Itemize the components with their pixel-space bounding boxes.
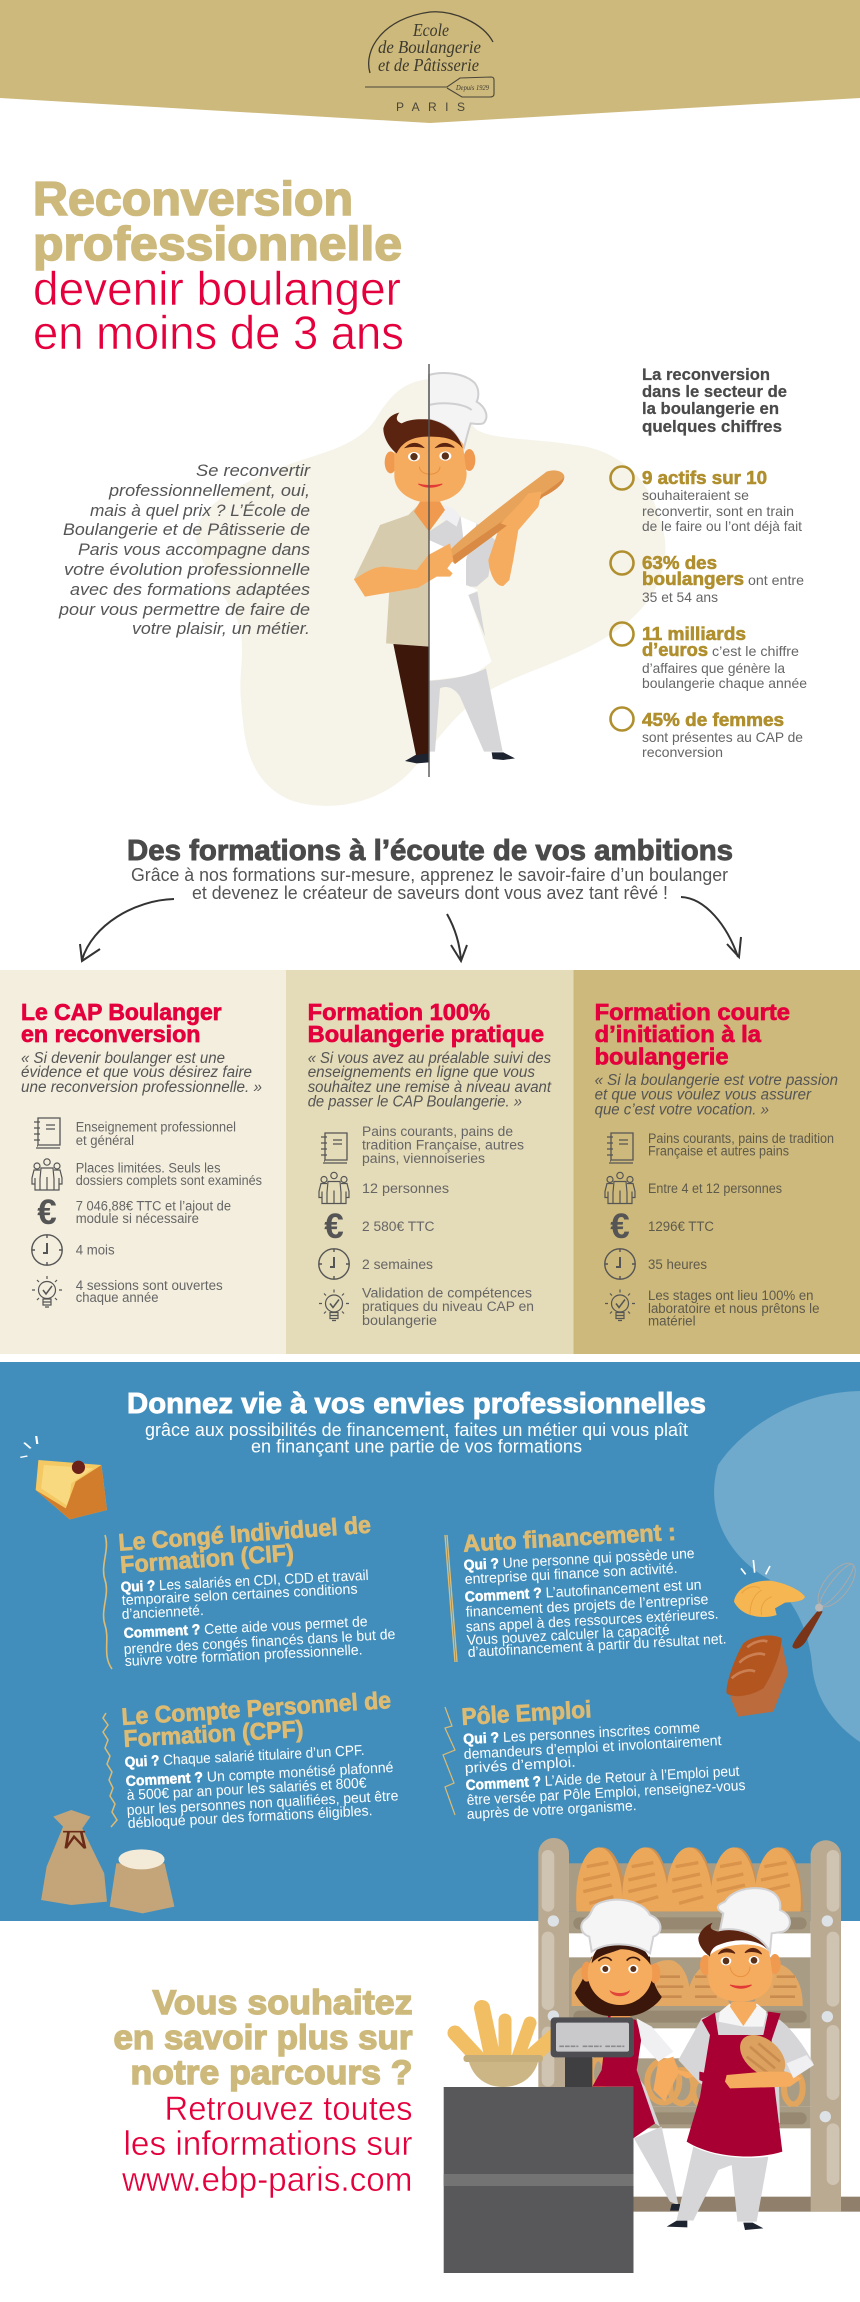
panel: Formation courte: Formation courte [595,999,790,1025]
panel: Formation courte: Entre 4 et 12 personnes [648,1181,782,1196]
block: Auto financement: financement des projets de l’entreprise [465,1592,709,1621]
intro paragraph: votre évolution professionnelle [64,561,310,579]
block: CIF [104,1512,396,1670]
stat: 45% de femmes [610,708,803,760]
panel: Formation 100%: boulangerie [362,1313,437,1328]
counter [444,2087,634,2273]
title: en moins de 3 ans [33,306,404,359]
section heading: formations: et devenez le créateur de saveurs dont vous avez tant rêvé ! [192,883,668,903]
panel: CAP Boulanger: évidence et que vous désirez faire [21,1064,252,1081]
logo: École de Boulangerie et de Pâtisserie: de Boulangerie [378,37,481,57]
block: Auto financement [445,1519,727,1662]
panel: Formation courte: 1296€ TTC [648,1219,714,1234]
block: CIF: Qui ? Les salariés en CDI, CDD et travail [120,1568,369,1596]
panel: financing background [0,1362,860,1921]
block: CIF: suivre votre formation professionnelle. [124,1642,363,1670]
heading: financing [127,1388,706,1457]
stats heading: dans le secteur de [642,383,787,401]
stat: 11 milliards d'euros: 11 milliards [642,623,746,644]
stat: 45% de femmes: sont présentes au CAP de [642,729,803,745]
intro paragraph: Paris vous accompagne dans [78,541,310,559]
stat: 63% des boulangers: boulangers [642,568,744,589]
panel: CAP Boulanger: chaque année [76,1290,158,1305]
block: Pôle Emploi: être versée par Pôle Emploi, renseignez-vous [466,1778,746,1809]
stat: 11 milliards d'euros: d’affaires que génère la [642,660,785,676]
call to action: en savoir plus sur [114,2019,412,2057]
block: CPF: Comment ? Un compte monétisé plafonné [125,1760,394,1790]
call to action: Vous souhaitez [152,1984,412,2022]
panel: Formation 100%: 12 personnes [362,1181,449,1196]
panel: Formation 100%: souhaitez une remise à niveau avant [308,1079,552,1096]
panel: Formation 100%: pains, viennoiseries [362,1151,485,1166]
block: CIF: Comment ? Cette aide vous permet de [123,1614,368,1642]
stat: 63% des boulangers: 35 et 54 ans [642,589,718,605]
panel: Formation 100%: de passer le CAP Boulangerie. » [308,1094,522,1110]
stat: 63% des boulangers: ont entre [748,572,804,588]
panel: Formation 100%: 2 580€ TTC [362,1219,435,1234]
intro paragraph: Boulangerie et de Pâtisserie de [63,521,310,539]
block: Pôle Emploi: Qui ? Les personnes inscrites comme [463,1720,700,1748]
intro paragraph [58,462,312,638]
heading: financing: grâce aux possibilités de financement, faites un métier qui vous plaît [145,1420,688,1440]
stat: 45% de femmes: reconversion [642,744,723,760]
panel: CAP Boulanger: Le CAP Boulanger [21,999,222,1025]
panel: Formation 100%: € [324,1207,344,1246]
illustration: man baker [667,1888,814,2230]
panel: Formation courte: « Si la boulangerie est votre passion [595,1072,838,1089]
block: Auto financement: sans appel à des ressources extérieures. [465,1606,719,1636]
block: CPF: à 500€ par an pour les salariés et 800€ [126,1775,367,1804]
stat: 11 milliards d'euros: boulangerie chaque année [642,675,807,691]
stats heading: La reconversion [642,366,770,384]
logo: École de Boulangerie et de Pâtisserie: et de Pâtisserie [378,55,479,75]
call to action: www.ebp-paris.com [121,2161,412,2199]
stats heading: quelques chiffres [642,418,782,436]
intro paragraph: professionnellement, oui, [108,482,310,500]
block: Auto financement: d’autofinancement à partir du résultat net. [467,1631,727,1661]
illustration: bread basket [455,2008,556,2087]
panel: Formation courte: et que vous voulez vous assurer [595,1087,812,1104]
block: Auto financement: Qui ? Une personne qui possède une [463,1546,695,1574]
panel: Formation courte: € [610,1207,630,1246]
panel: Formation 100%: Formation 100% [308,999,490,1025]
panel: CAP Boulanger: Enseignement professionnel [76,1120,236,1135]
header band [0,0,860,123]
title: professionnelle [33,217,402,270]
stat: 11 milliards d'euros: d’euros [642,639,708,660]
block: CPF: débloqué pour des formations éligibles. [127,1803,373,1832]
panel: CAP Boulanger: 4 sessions sont ouvertes [76,1278,223,1293]
arrow: left [80,899,174,961]
panel: Formation courte: boulangerie [595,1044,728,1070]
intro paragraph: pour vous permettre de faire de [58,601,310,619]
panel: CAP Boulanger: 7 046,88€ TTC et l’ajout de [76,1198,231,1214]
panel: CAP Boulanger: en reconversion [21,1021,200,1047]
title: devenir boulanger [33,262,401,315]
illustration: cash register [551,2017,634,2088]
illustration: half-baker man [354,373,564,763]
stats heading: la boulangerie en [642,400,779,418]
section heading: formations: Grâce à nos formations sur-mesure, apprenez le savoir-faire d’un boulanger [131,865,728,885]
block: Pôle Emploi: privés d’emploi. [464,1755,576,1777]
logo: École de Boulangerie et de Pâtisserie: Depuis 1929 [455,84,489,92]
panel: CAP Boulanger: « Si devenir boulanger est une [21,1050,225,1067]
panel: Formation courte: Les stages ont lieu 100% en [648,1288,814,1303]
panel: Formation courte: que c’est votre vocation. » [595,1101,769,1118]
block: Auto financement: Auto financement : [462,1519,677,1558]
panel: CAP Boulanger [0,970,286,1354]
block: CPF: Le Compte Personnel de [121,1687,392,1731]
panel: Formation 100%: 2 semaines [362,1257,433,1272]
block: Pôle Emploi [443,1696,746,1823]
block: Pôle Emploi: auprès de votre organisme. [466,1798,637,1823]
panel: Formation courte: matériel [648,1314,696,1328]
panel: Formation courte: Française et autres pains [648,1144,789,1159]
block: CIF: temporaire selon certaines conditions [121,1581,358,1609]
block: Pôle Emploi: Comment ? L’Aide de Retour à l’Emploi peut [465,1764,740,1794]
panel: Formation courte: d’initiation à la [595,1021,761,1047]
heading: financing: Donnez vie à vos envies professionnelles [127,1388,706,1420]
title: Reconversion [33,172,353,225]
block: Auto financement: entreprise qui finance son activité. [464,1561,678,1588]
logo: École de Boulangerie et de Pâtisserie: PARIS [396,100,465,114]
panel: CAP Boulanger: Places limitées. Seuls les [76,1161,221,1176]
panel: CAP Boulanger: dossiers complets sont examinés [76,1173,262,1188]
panel: Formation courte: laboratoire et nous prêtons le [648,1301,820,1316]
block: Pôle Emploi: Pôle Emploi [461,1696,592,1731]
section heading: formations [127,835,733,903]
block: CIF: d’ancienneté. [121,1603,204,1623]
stat: 9 actifs sur 10 [610,466,802,534]
call to action [114,1984,412,2199]
panel: CAP Boulanger: module si nécessaire [76,1211,199,1226]
block: CPF: Formation (CPF) [123,1716,304,1753]
panel: Formation 100%: Boulangerie pratique [308,1021,544,1047]
block: CPF: Qui ? Chaque salarié titulaire d’un CPF. [124,1743,365,1771]
cream blob background [196,379,665,806]
panel: Formation courte: Pains courants, pains de tradition [648,1131,834,1146]
block: Auto financement: Comment ? L’autofinancement est un [464,1577,702,1606]
logo: École de Boulangerie et de Pâtisserie: Ecole [412,20,449,40]
stat: 9 actifs sur 10: de le faire ou l’ont déjà fait [642,518,802,534]
block: CPF: pour les personnes non qualifiées, peut être [126,1788,399,1819]
illustration: flour sacks [41,1810,174,1913]
panel: Formation courte: 35 heures [648,1257,707,1272]
block: Auto financement: Vous pouvez calculer la capacité [466,1622,670,1649]
stat: 9 actifs sur 10: reconvertir, sont en train [642,503,794,519]
intro paragraph: avec des formations adaptées [70,581,310,599]
stat: 11 milliards d'euros [610,622,807,691]
heading: financing: en finançant une partie de vos formations [251,1437,582,1457]
stat: 9 actifs sur 10: souhaiteraient se [642,487,749,503]
call to action: Retrouvez toutes [164,2090,412,2128]
stat: 63% des boulangers: 63% des [642,552,717,573]
arrow: middle [447,914,467,961]
call to action: les informations sur [124,2125,412,2163]
call to action: notre parcours ? [130,2054,412,2092]
illustration: bakery rack [538,1838,860,2212]
block: Pôle Emploi: demandeurs d’emploi et involontairement [463,1733,722,1763]
panel: Formation 100%: pratiques du niveau CAP en [362,1299,534,1314]
block: CIF: prendre des congés financés dans le but de [123,1627,396,1658]
stat: 45% de femmes: 45% de femmes [642,709,784,730]
panel: Formation courte [574,970,860,1354]
divider line [428,364,430,777]
panel: Formation 100%: Validation de compétences [362,1286,532,1301]
stats heading [642,366,787,436]
panel: Formation 100%: enseignements en ligne que vous [308,1064,535,1081]
intro paragraph: mais à quel prix ? L’École de [90,501,310,520]
panel: Formation 100%: Pains courants, pains de [362,1124,513,1139]
stat: 11 milliards d'euros: c’est le chiffre [712,643,799,659]
panel: Formation 100%: tradition Française, autres [362,1138,524,1152]
panel: Formation 100%: « Si vous avez au préalable suivi des [308,1050,551,1067]
arrow: right [681,897,741,957]
intro paragraph: votre plaisir, un métier. [132,620,310,638]
panel: CAP Boulanger: 4 mois [76,1243,115,1258]
illustration: croissant, whisk and loaf [726,1557,860,1717]
intro paragraph: Se reconvertir [196,462,312,480]
panel: CAP Boulanger: une reconversion professionnelle. » [21,1079,262,1096]
block: CIF: Le Congé Individuel de [117,1512,372,1557]
icon: cake slice [20,1436,107,1519]
illustration: woman baker [575,1900,702,2211]
panel: Formation 100% [286,970,574,1354]
block: CPF [103,1687,399,1832]
section heading: formations: Des formations à l’écoute de vos ambitions [127,835,733,867]
stat: 9 actifs sur 10: 9 actifs sur 10 [642,467,767,488]
stat: 63% des boulangers [610,552,804,605]
title [33,172,404,359]
panel: CAP Boulanger: € [37,1193,57,1232]
panel: CAP Boulanger: et général [76,1133,134,1148]
block: CIF: Formation (CIF) [119,1540,295,1579]
logo: École de Boulangerie et de Pâtisserie [365,12,494,114]
